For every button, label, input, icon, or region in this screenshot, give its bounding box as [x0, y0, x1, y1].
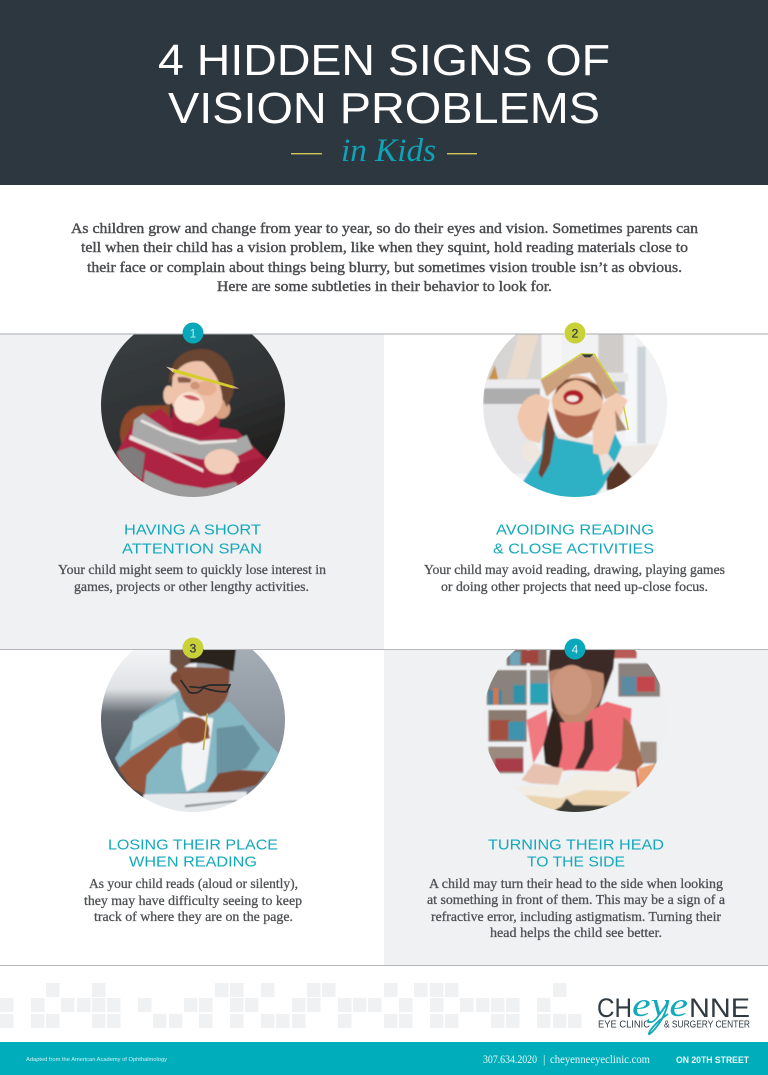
text 4: refractive error, including astigmatism. Turning their: [431, 910, 721, 925]
badge 4: 4: [572, 642, 579, 656]
logo: Cheyenne Eye Clinic & Surgery Center: [597, 987, 750, 1034]
heading 1: [122, 522, 262, 558]
text 2: Your child may avoid reading, drawing, playing games: [424, 563, 725, 578]
title: 4 HIDDEN SIGNS OF: [158, 36, 610, 85]
text 4: at something in front of them. This may be a sign of a: [427, 893, 726, 908]
logo: Cheyenne Eye Clinic & Surgery Center: NNE: [689, 993, 750, 1023]
intro paragraph: [71, 221, 699, 295]
text 3: [84, 877, 302, 925]
heading 2: & CLOSE ACTIVITIES: [493, 540, 654, 558]
title: VISION PROBLEMS: [168, 84, 600, 133]
text 1: Your child might seem to quickly lose interest in: [58, 563, 326, 578]
badge 4: [564, 638, 586, 660]
heading 3: [108, 836, 278, 870]
panel 3: losing their place: [84, 638, 302, 924]
text 2: or doing other projects that need up-close focus.: [441, 580, 708, 595]
logo: Cheyenne Eye Clinic & Surgery Center: CH: [597, 993, 632, 1023]
badge 3: [182, 638, 204, 658]
contact details: [483, 1052, 651, 1066]
heading 4: [488, 836, 664, 870]
contact details: |: [543, 1052, 545, 1066]
text 4: head helps the child see better.: [490, 926, 662, 941]
text 3: they may have difficulty seeing to keep: [84, 894, 302, 909]
contact details: 307.634.2020: [483, 1052, 537, 1066]
badge 1: [182, 322, 204, 344]
text 4: [427, 877, 726, 941]
text 1: games, projects or other lengthy activities.: [74, 580, 309, 595]
photo 2: girl with book on head: [483, 334, 667, 497]
badge 3: 3: [190, 642, 197, 656]
source credit: Adapted from the American Academy of Ophthalmology: [26, 1057, 167, 1063]
contact details: cheyenneeyeclinic.com: [550, 1052, 651, 1066]
photo 4: girl reading a book: [486, 649, 661, 812]
heading 1: ATTENTION SPAN: [122, 540, 262, 558]
badge 2: 2: [572, 326, 579, 340]
subtitle: in Kids: in Kids: [341, 133, 436, 169]
header banner: [0, 0, 768, 185]
heading 4: TURNING THEIR HEAD: [488, 836, 664, 854]
text 1: [58, 563, 326, 595]
panel 2: avoiding reading: [424, 322, 725, 594]
heading 4: TO THE SIDE: [527, 854, 625, 870]
photo 3: boy with glasses reading: [97, 645, 290, 815]
heading 1: HAVING A SHORT: [124, 522, 261, 538]
badge 2: [564, 322, 586, 344]
heading 3: LOSING THEIR PLACE: [108, 836, 278, 854]
logo: Cheyenne Eye Clinic & Surgery Center: eye: [632, 987, 688, 1024]
text 3: As your child reads (aloud or silently),: [89, 877, 298, 892]
heading 2: [493, 522, 654, 558]
decorative pixel pattern: [0, 983, 582, 1028]
footer bar: [0, 1042, 768, 1075]
panel 1: short attention span: [0, 322, 384, 649]
text 3: track of where they are on the page.: [94, 910, 293, 925]
heading 3: WHEN READING: [129, 854, 257, 870]
photo 1: boy with pencil: [97, 330, 290, 502]
address: ON 20TH STREET: [676, 1055, 749, 1066]
heading 2: AVOIDING READING: [496, 522, 654, 538]
intro paragraph: tell when their child has a vision problem, like when they squint, hold reading materials close to: [81, 240, 688, 256]
intro paragraph: their face or complain about things being blurry, but sometimes vision trouble isn’t as obvious.: [87, 260, 682, 276]
text 2: [424, 563, 725, 595]
title: [158, 36, 610, 133]
panel 4: turning their head: [384, 638, 768, 965]
intro paragraph: Here are some subtleties in their behavior to look for.: [217, 279, 552, 295]
text 4: A child may turn their head to the side when looking: [429, 877, 723, 892]
intro paragraph: As children grow and change from year to year, so do their eyes and vision. Sometimes parents can: [71, 221, 699, 237]
badge 1: 1: [190, 326, 197, 340]
logo: Cheyenne Eye Clinic & Surgery Center: & SURGERY CENTER: [664, 1020, 750, 1030]
logo: Cheyenne Eye Clinic & Surgery Center: EYE CLINIC: [598, 1020, 650, 1030]
